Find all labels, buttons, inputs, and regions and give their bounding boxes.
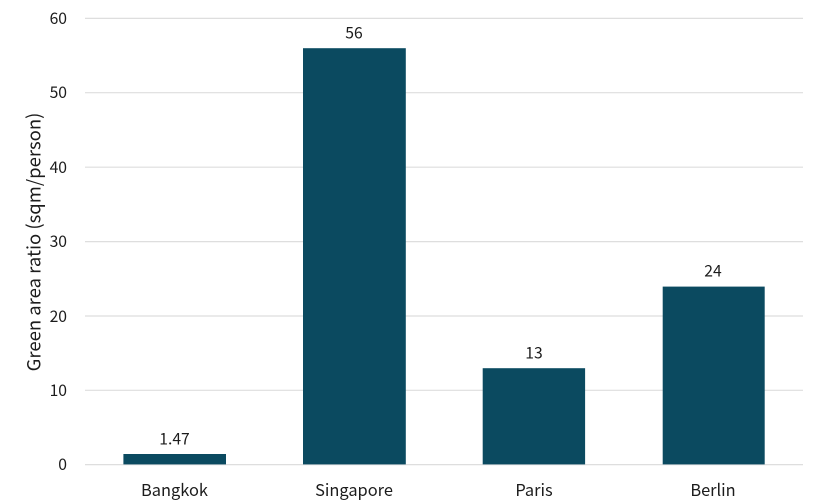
y-axis tick labels: 50 xyxy=(50,80,67,103)
y-axis title: Green area ratio (sqm/person) xyxy=(20,113,46,371)
y-axis tick labels xyxy=(50,6,67,475)
y-axis tick labels: 10 xyxy=(50,378,67,401)
category labels: Singapore xyxy=(315,477,393,501)
category labels xyxy=(141,477,736,501)
bars xyxy=(123,48,765,464)
data labels xyxy=(159,20,722,449)
y-axis tick labels: 30 xyxy=(50,229,67,252)
data labels: 1.47 xyxy=(159,426,190,449)
category labels: Bangkok xyxy=(141,477,208,501)
category labels: Paris xyxy=(515,477,553,501)
category labels: Berlin xyxy=(690,477,736,501)
y-axis tick labels: 0 xyxy=(58,452,67,475)
data labels: 56 xyxy=(345,20,363,44)
data labels: 13 xyxy=(525,340,543,363)
y-axis tick labels: 20 xyxy=(50,304,67,327)
y-axis tick labels: 40 xyxy=(50,155,67,178)
data labels: 24 xyxy=(704,259,722,282)
y-axis tick labels: 60 xyxy=(50,6,67,29)
